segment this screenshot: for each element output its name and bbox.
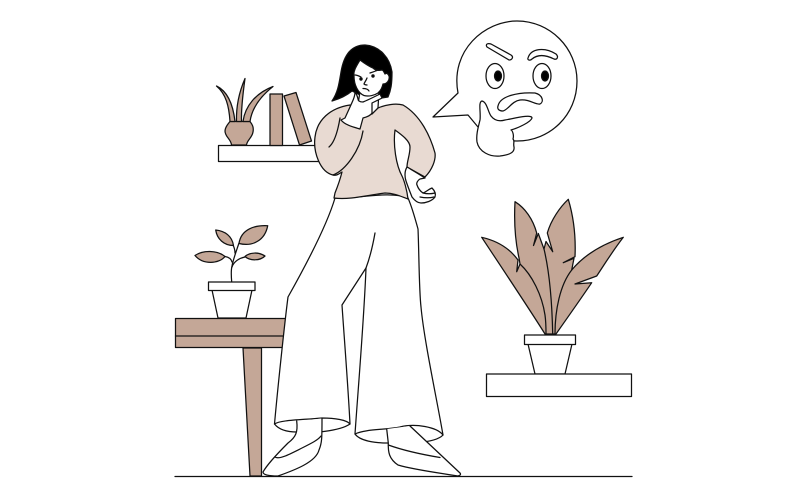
hair xyxy=(332,45,392,101)
table plant xyxy=(195,226,268,318)
wall shelf with books and vase xyxy=(216,78,324,162)
pot xyxy=(212,290,252,318)
book leaning xyxy=(284,92,312,145)
hand xyxy=(477,101,532,156)
left shoe inner line xyxy=(275,436,321,458)
facial features xyxy=(355,70,378,91)
lower hand xyxy=(405,167,435,203)
speech bubble with thinking face xyxy=(433,21,577,156)
right shoe inner line xyxy=(388,445,440,458)
vase plant xyxy=(216,78,273,145)
shelf xyxy=(486,374,632,396)
face xyxy=(354,60,389,96)
leaves xyxy=(482,199,623,334)
leaves and stem xyxy=(195,226,268,282)
bubble xyxy=(433,21,577,141)
eye left xyxy=(486,64,504,88)
table xyxy=(176,318,288,476)
eye right xyxy=(533,64,551,88)
table top xyxy=(176,318,288,348)
trousers xyxy=(274,195,443,443)
right shelf plant xyxy=(482,199,632,396)
ground line xyxy=(175,476,632,478)
raised hand xyxy=(341,92,382,129)
pot rim xyxy=(524,335,576,344)
pot rim xyxy=(208,282,255,290)
woman xyxy=(263,45,461,476)
right shoe xyxy=(387,426,461,476)
sweater xyxy=(315,104,435,199)
eyebrow left xyxy=(486,44,512,60)
mouth xyxy=(498,93,542,111)
shelf xyxy=(218,146,324,162)
table leg xyxy=(243,348,262,476)
left shoe xyxy=(263,418,322,476)
book upright xyxy=(270,94,282,146)
neck xyxy=(356,90,379,116)
pot xyxy=(528,344,572,374)
eyebrow right xyxy=(528,49,557,60)
